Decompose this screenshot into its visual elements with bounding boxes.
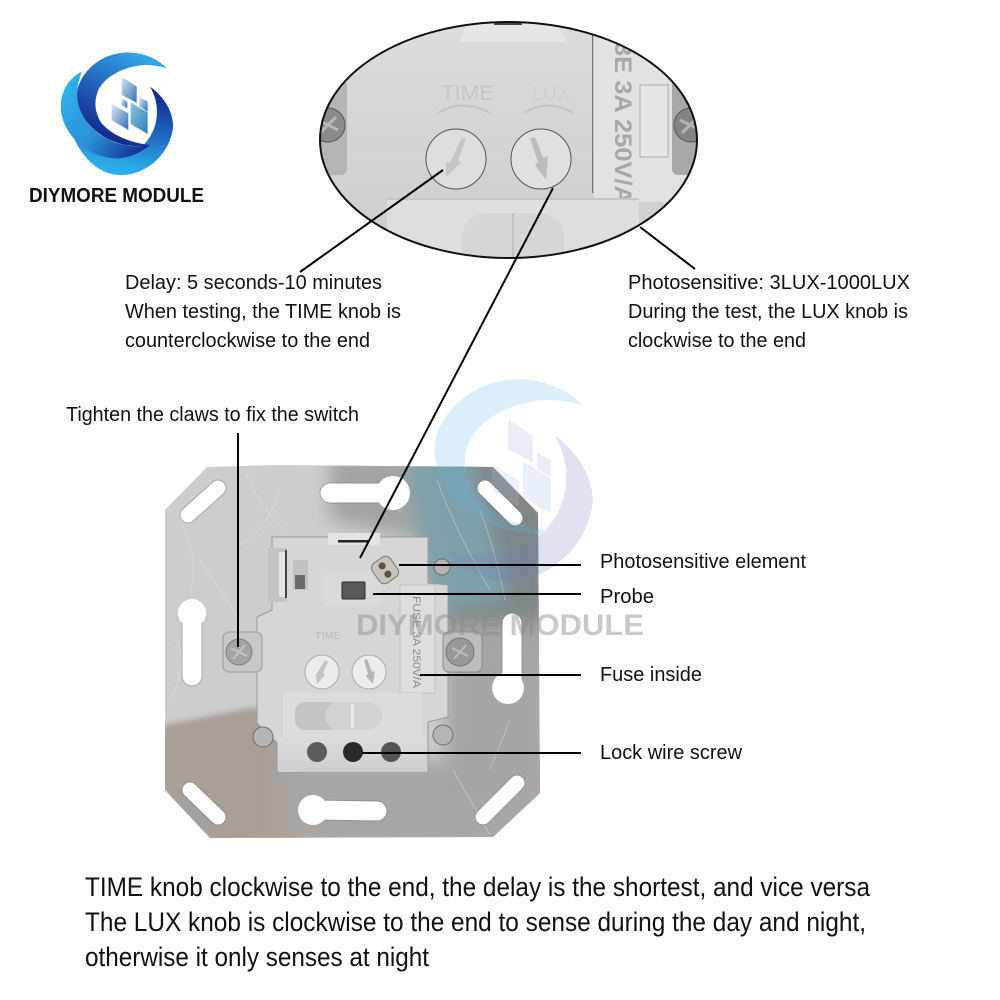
logo mark (61, 52, 173, 175)
photosensitive callout: clockwise to the end (628, 330, 806, 352)
claws label: Tighten the claws to fix the switch (66, 404, 359, 426)
leader: photosensitive element (399, 564, 581, 566)
fuse panel: FUSE 3A 250V/A (410, 596, 422, 689)
fuse panel (400, 585, 435, 693)
plate slots (188, 488, 517, 817)
top tab (460, 24, 567, 42)
right screw (672, 84, 696, 175)
lock wire screw label: Lock wire screw (600, 742, 743, 764)
bottom notes (85, 872, 871, 972)
delay callout (125, 272, 401, 352)
TIME label: TIME (441, 82, 494, 105)
watermark wordmark: DIYMORE MODULE (356, 609, 644, 642)
clamp screw right (443, 632, 482, 672)
watermark logo (435, 379, 593, 581)
right fuse panel (594, 54, 687, 202)
leader: fuse (420, 674, 581, 676)
plate slot openings (188, 488, 517, 817)
LUX knob (511, 129, 571, 189)
leader: probe (373, 593, 581, 595)
leader lines (238, 170, 695, 753)
probe label: Probe (600, 586, 654, 608)
terminal block (278, 737, 427, 772)
zoom lens: knob close-up photo (321, 23, 696, 257)
side latch (268, 548, 308, 602)
left screw (321, 82, 347, 175)
lens outline (320, 22, 697, 258)
front slide block (387, 198, 639, 257)
small knobs (305, 655, 386, 689)
photosensitive callout: Photosensitive: 3LUX-1000LUX (628, 272, 910, 294)
bottom notes: TIME knob clockwise to the end, the delay is the shortest, and vice versa (85, 872, 871, 902)
lens background (330, 23, 668, 229)
delay callout: Delay: 5 seconds-10 minutes (125, 272, 382, 294)
keyhole openings (178, 476, 524, 825)
leader: photosensitive range (640, 227, 695, 269)
plate body (165, 465, 540, 838)
knob arcs (438, 106, 573, 113)
top tab (328, 533, 380, 545)
fuse rating: 3E 3A 250V/A (609, 42, 636, 204)
mounting plate photo (165, 465, 540, 838)
sensor probe (324, 572, 382, 606)
logo wordmark: DIYMORE MODULE (29, 185, 204, 207)
logo (29, 52, 204, 207)
leader: delay knob (300, 170, 443, 272)
delay callout: When testing, the TIME knob is (125, 301, 401, 323)
module body (257, 537, 448, 772)
slide block (283, 693, 422, 737)
plate shading (150, 450, 550, 850)
leader: claws (237, 433, 239, 647)
fuse label: Fuse inside (600, 664, 702, 686)
delay callout: counterclockwise to the end (125, 330, 370, 352)
bottom notes: The LUX knob is clockwise to the end to sense during the day and night, (85, 907, 866, 937)
time label on module: TIME (315, 631, 341, 642)
LUX label: LUX (532, 82, 570, 105)
plate scratches (170, 470, 510, 835)
photosensitive callout: During the test, the LUX knob is (628, 301, 908, 323)
TIME knob (426, 129, 486, 189)
leader: lux knob to module (360, 188, 553, 558)
photosensitive callout (628, 272, 910, 352)
photosensitive element label: Photosensitive element (600, 551, 806, 573)
leader: lock wire screw (362, 752, 581, 754)
bottom notes: otherwise it only senses at night (85, 942, 429, 972)
photosensitive element (369, 554, 401, 586)
small screws (253, 559, 453, 747)
clamp screw left (223, 632, 262, 672)
